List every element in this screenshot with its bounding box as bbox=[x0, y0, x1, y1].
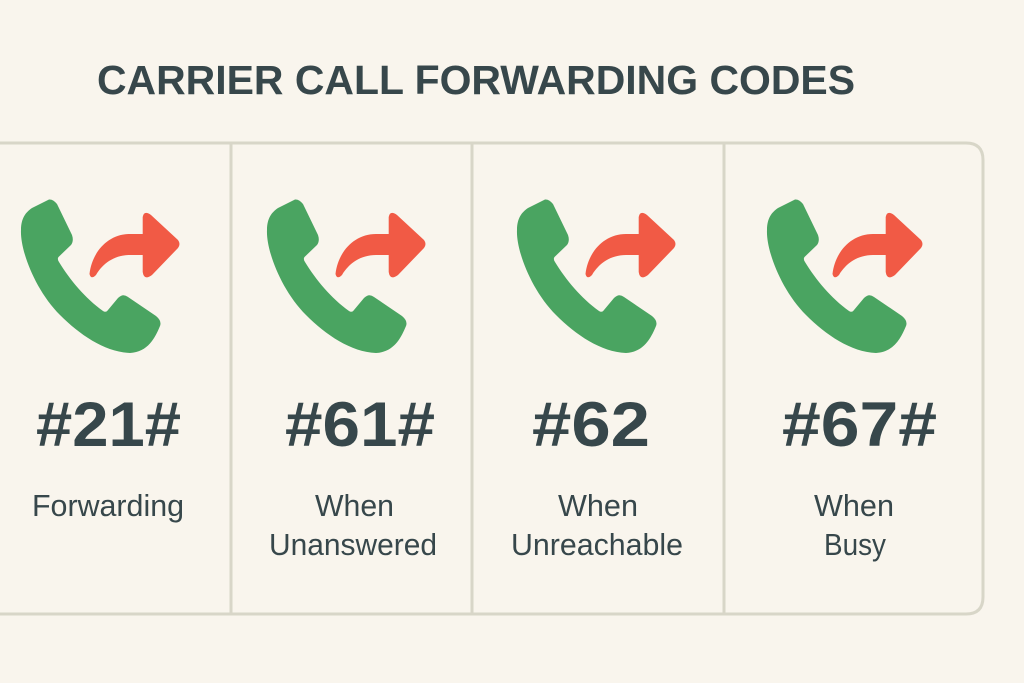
label line 2: Unanswered bbox=[269, 527, 437, 562]
code: #62 bbox=[532, 390, 650, 460]
code: #67# bbox=[782, 390, 937, 460]
panel: code table frame bbox=[0, 143, 983, 614]
icon: phone with forward arrow bbox=[267, 199, 426, 353]
label: When bbox=[558, 488, 638, 523]
label line 2: Busy bbox=[824, 527, 886, 562]
label line 2: Unreachable bbox=[511, 527, 683, 562]
icon: phone with forward arrow bbox=[21, 199, 180, 353]
column: #21# forwarding bbox=[21, 199, 184, 523]
label: When bbox=[814, 488, 894, 523]
title: CARRIER CALL FORWARDING CODES bbox=[97, 57, 855, 103]
icon: phone with forward arrow bbox=[767, 199, 922, 353]
icon: phone with forward arrow bbox=[517, 199, 676, 353]
code: #21# bbox=[36, 390, 181, 460]
code: #61# bbox=[285, 390, 435, 460]
label: Forwarding bbox=[32, 488, 184, 523]
column: #67# when busy bbox=[767, 199, 937, 562]
label: When bbox=[315, 488, 394, 523]
column: #62 when unreachable bbox=[511, 199, 683, 562]
column: #61# when unanswered bbox=[267, 199, 437, 562]
